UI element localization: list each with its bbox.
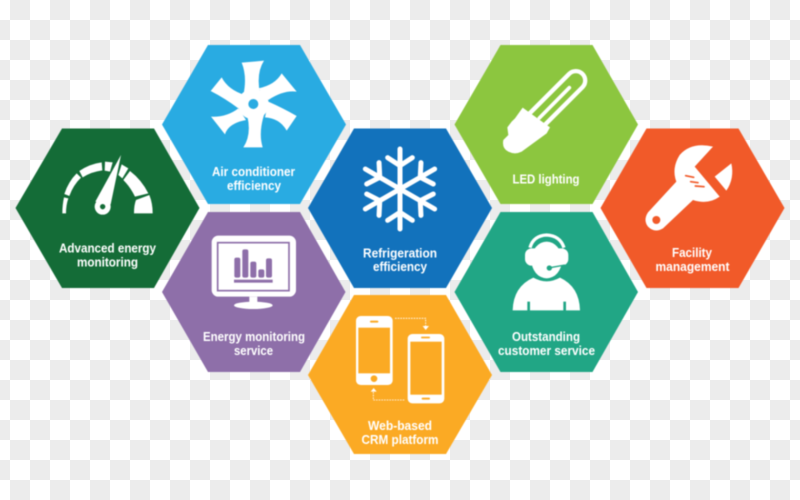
panel: web-based CRM platform — [308, 295, 492, 454]
label: refrigeration efficiency: Refrigeration — [363, 246, 437, 260]
icon: gauge — [62, 155, 153, 215]
icon: wrench — [645, 145, 732, 230]
label: refrigeration efficiency — [363, 246, 437, 274]
label: facility management: Facility — [672, 245, 713, 260]
label: advanced energy monitoring: monitoring — [77, 254, 138, 270]
panel: outstanding customer service — [454, 212, 638, 372]
icon: snowflake — [359, 149, 441, 229]
label: web-based CRM platform: Web-based — [368, 418, 432, 433]
label: facility management: management — [656, 259, 730, 274]
label: outstanding customer service: Outstanding — [512, 329, 580, 344]
icon: light bulb — [503, 71, 585, 153]
label: advanced energy monitoring — [59, 240, 157, 270]
label: advanced energy monitoring: Advanced energy — [59, 240, 157, 256]
panel: LED lighting — [454, 45, 638, 204]
panel: air conditioner efficiency — [162, 45, 346, 204]
panel: facility management — [600, 128, 784, 288]
label: LED lighting: LED lighting — [512, 172, 580, 186]
label: energy monitoring service — [203, 329, 305, 358]
panel: advanced energy monitoring — [16, 128, 200, 288]
label: web-based CRM platform — [362, 418, 438, 447]
label: air conditioner efficiency: Air conditioner — [212, 164, 295, 179]
icon: headset person — [513, 235, 580, 310]
label: outstanding customer service: customer service — [498, 343, 595, 358]
label: web-based CRM platform: CRM platform — [362, 432, 438, 447]
label: facility management — [656, 245, 730, 274]
panel: refrigeration efficiency — [308, 128, 492, 288]
label: outstanding customer service — [498, 329, 595, 358]
icon: monitor — [212, 236, 296, 309]
icon: fan — [211, 61, 297, 147]
label: refrigeration efficiency: efficiency — [373, 259, 428, 274]
label: energy monitoring service: Energy monitoring — [203, 329, 305, 344]
label: air conditioner efficiency — [212, 164, 295, 193]
label: air conditioner efficiency: efficiency — [227, 178, 282, 193]
label: energy monitoring service: service — [234, 343, 273, 358]
icon: phones with sync arrows — [356, 316, 444, 403]
panel: energy monitoring service — [162, 212, 346, 372]
